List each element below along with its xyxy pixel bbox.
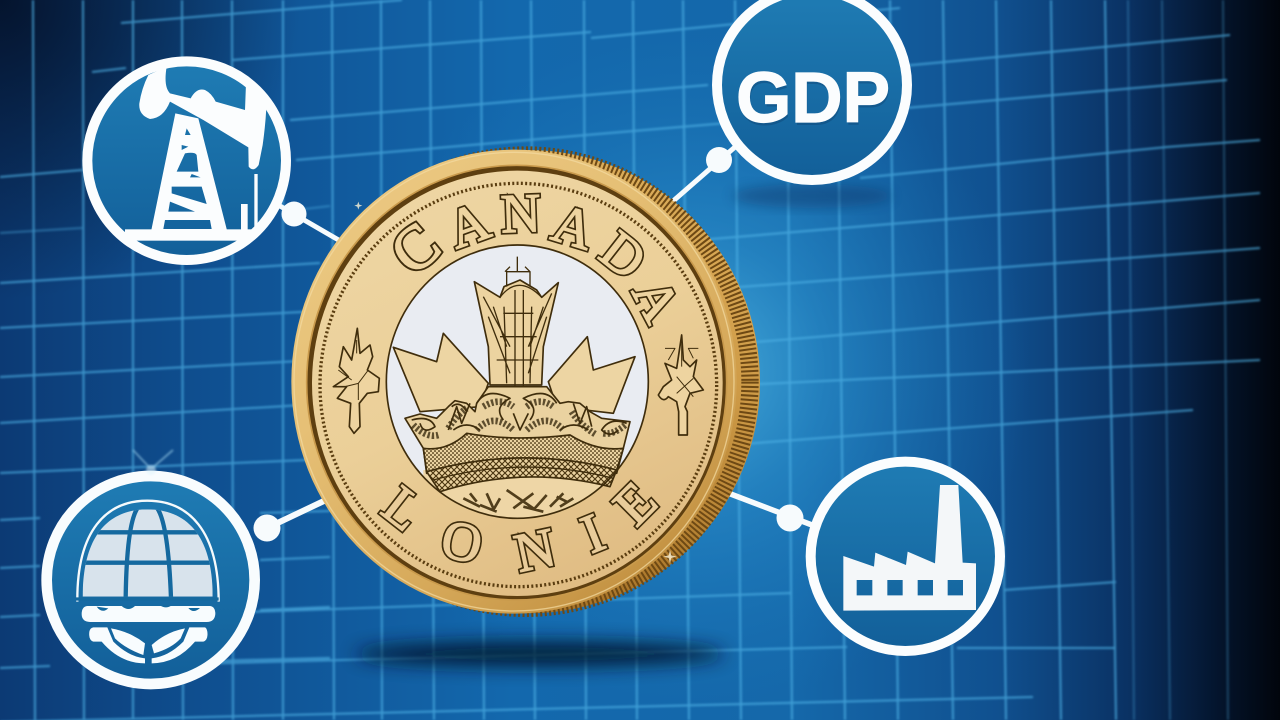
LONIE face layer: I [573,501,613,565]
crown dotted band [423,433,623,472]
CANADA outline layer: D [589,218,658,291]
LONIE outline layer [371,470,668,584]
crown hatched band [427,458,617,492]
CANADA face layer: A [439,189,498,260]
globe panels [76,500,220,602]
CANADA outline layer: A [620,268,693,332]
connector: globe to coin [254,500,326,542]
centre disc outline [386,245,648,518]
crown foliage [405,387,630,473]
lettering: CANADA [378,182,693,332]
LONIE outline layer: E [601,470,668,537]
LONIE face layer: L [371,474,435,542]
CANADA face layer [378,182,693,332]
LONIE outline layer: N [509,516,561,584]
connector: GDP to coin [672,147,735,202]
coin rim [291,150,737,614]
coin highlights [354,202,677,563]
coin rim groove [307,165,727,600]
LONIE face layer: O [436,508,488,576]
centre disc [386,245,648,518]
icon: globe and hands [47,476,255,684]
foliage texture [412,394,627,512]
CANADA face layer: A [545,192,602,262]
CANADA face layer: D [589,218,658,291]
LONIE face layer [371,470,668,584]
connector: factory to coin [728,493,812,532]
bead ring [320,183,717,587]
LONIE outline layer: O [436,508,488,576]
icon: GDP badge: GDP [736,59,890,138]
CANADA outline layer [378,182,693,332]
ornament: left maple sprig [333,328,379,433]
CANADA outline layer: A [439,189,498,260]
CANADA outline layer: N [500,182,542,244]
CANADA face layer: C [378,209,453,288]
coin [291,150,760,614]
CANADA face layer: A [620,268,693,332]
LONIE face layer: E [601,470,668,537]
coin shadow [355,641,725,667]
ornament: right maple sprig [658,335,703,435]
CANADA outline layer: C [378,209,453,288]
icon: oil pumpjack [87,61,286,260]
crown ermine base [423,470,601,518]
coin edge with reeding [297,150,760,613]
icon: GDP badge [717,0,907,208]
CANADA outline layer: A [545,192,602,262]
lettering: LONIE [371,470,668,584]
sparkle: globe top [133,450,173,475]
coin field [312,171,723,596]
connector: oil to coin [280,202,342,242]
maple leaves and crown [386,245,648,523]
LONIE outline layer: L [371,474,435,542]
LONIE face layer: N [509,516,561,584]
icon: factory [811,462,1000,651]
LONIE outline layer: I [573,501,613,565]
CANADA face layer: N [500,182,542,244]
icon: GDP badge: GDP [737,62,891,141]
hands band [82,605,215,663]
